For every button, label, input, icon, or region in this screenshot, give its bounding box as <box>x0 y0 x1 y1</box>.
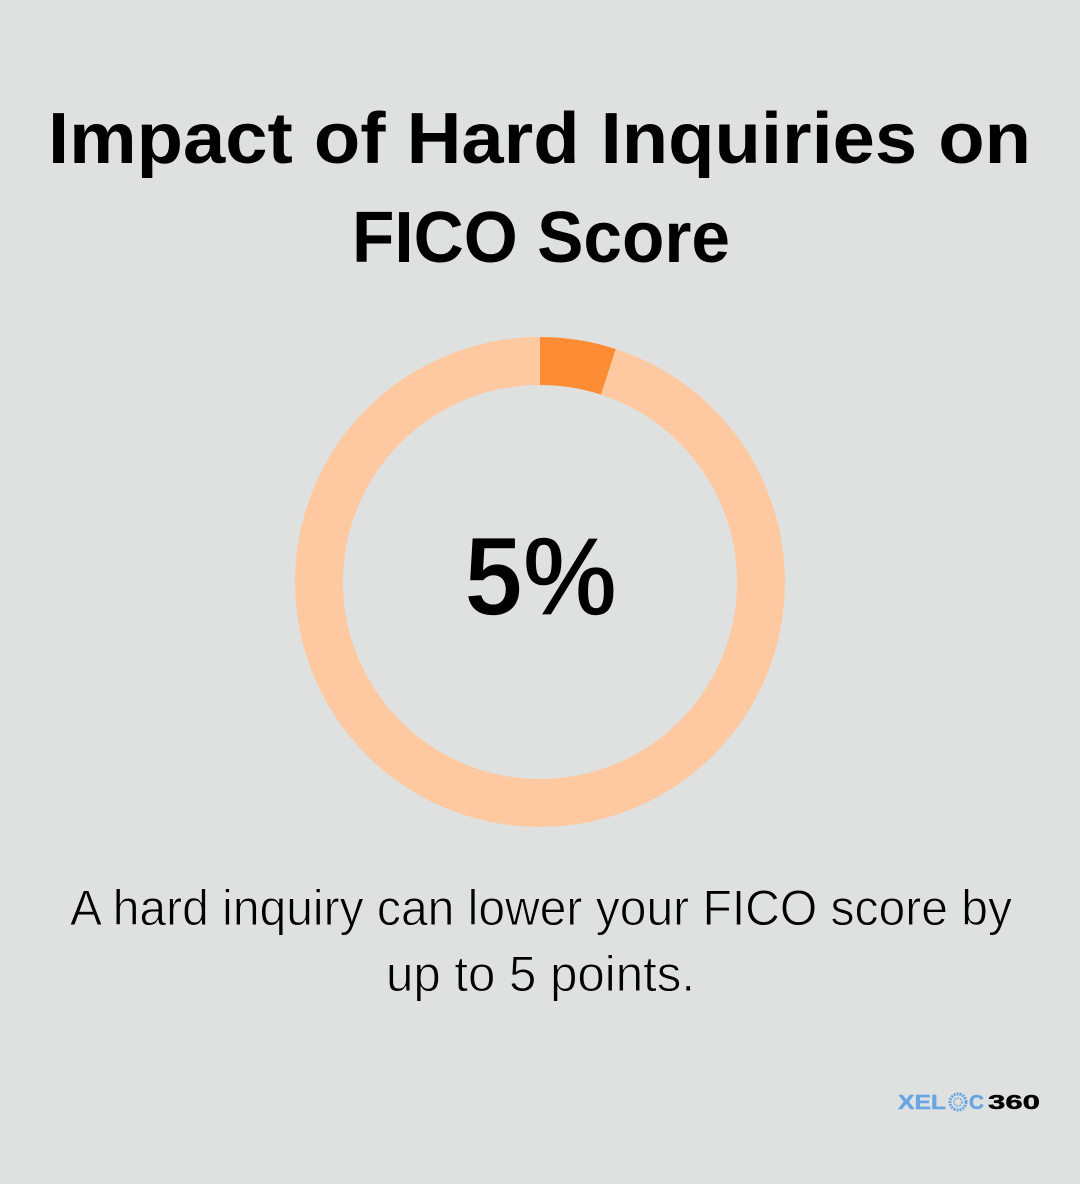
title <box>48 99 1031 278</box>
logo: HELOC360 <box>898 1092 1040 1114</box>
logo text: 360: 360 <box>988 1092 1040 1114</box>
center value: 5% <box>464 514 617 639</box>
description text: up to 5 points. <box>386 946 695 1002</box>
description text: A hard inquiry can lower your FICO score by <box>70 880 1012 936</box>
logo icon: swirl O <box>950 1094 966 1110</box>
ring: remaining share <box>319 361 761 803</box>
logo text: XEL: XEL <box>898 1092 946 1114</box>
donut chart: 5% <box>319 337 761 803</box>
logo text: C: C <box>969 1092 984 1114</box>
title: FICO Score <box>352 198 730 278</box>
ring segment: 5% highlighted <box>540 337 616 395</box>
title: Impact of Hard Inquiries on <box>48 99 1031 179</box>
description text <box>70 880 1012 1002</box>
